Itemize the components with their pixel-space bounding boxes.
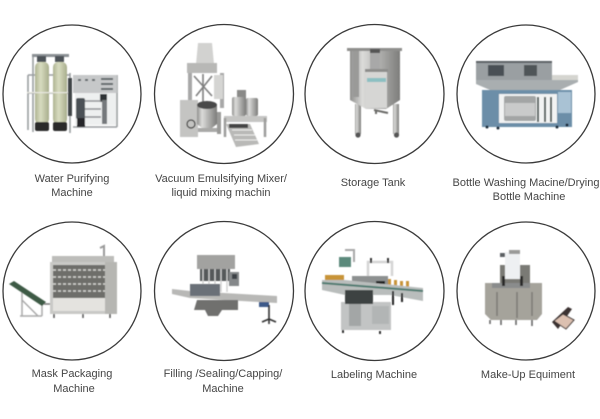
- label: filling sealing capping machine: Filling /Sealing/Capping/: [164, 368, 283, 380]
- icon: make-up equipment: [485, 250, 574, 329]
- panel: storage tank: [305, 24, 444, 164]
- panel: mask packaging machine: [3, 222, 141, 360]
- icon: bottle washing machine: [476, 61, 578, 130]
- label: mask packaging machine: Mask Packaging: [32, 368, 112, 380]
- panel: filling sealing capping machine: [154, 222, 294, 360]
- circle frame: [3, 222, 141, 360]
- label: bottle washing machine: Bottle Machine: [493, 191, 565, 203]
- label: make-up equipment: Make-Up Equiment: [481, 369, 575, 381]
- label: labeling machine: Labeling Machine: [331, 369, 417, 381]
- panel: vacuum emulsifying mixer: [154, 24, 294, 164]
- label: vacuum emulsifying mixer: Vacuum Emulsifying Mixer/: [155, 173, 288, 185]
- label: mask packaging machine: Machine: [53, 383, 95, 395]
- label: storage tank: Storage Tank: [341, 177, 406, 189]
- icon: filling machine: [172, 255, 277, 324]
- label: bottle washing machine: Bottle Washing Macine/Drying: [453, 177, 599, 189]
- label: water purifying machine: Machine: [51, 187, 93, 199]
- label: water purifying machine: Water Purifying: [35, 173, 109, 185]
- circle frame: [154, 24, 294, 164]
- icon: vacuum emulsifying mixer: [180, 43, 267, 147]
- label: vacuum emulsifying mixer: liquid mixing machin: [171, 187, 271, 199]
- icon: labeling machine: [322, 250, 423, 334]
- circle frame: [154, 222, 294, 360]
- panel: water purifying machine: [3, 25, 141, 163]
- panel: bottle washing machine: [457, 25, 595, 163]
- circle frame: [457, 222, 595, 360]
- panel: make-up equipment: [457, 222, 595, 360]
- panel: labeling machine: [305, 222, 444, 360]
- icon: mask packaging machine: [9, 246, 117, 318]
- icon: storage tank: [347, 48, 402, 138]
- circle frame: [457, 25, 595, 163]
- circle frame: [3, 25, 141, 163]
- circle frame: [305, 24, 444, 164]
- icon: water purifying machine: [27, 54, 117, 133]
- label: filling sealing capping machine: Machine: [202, 383, 244, 395]
- circle frame: [305, 222, 444, 360]
